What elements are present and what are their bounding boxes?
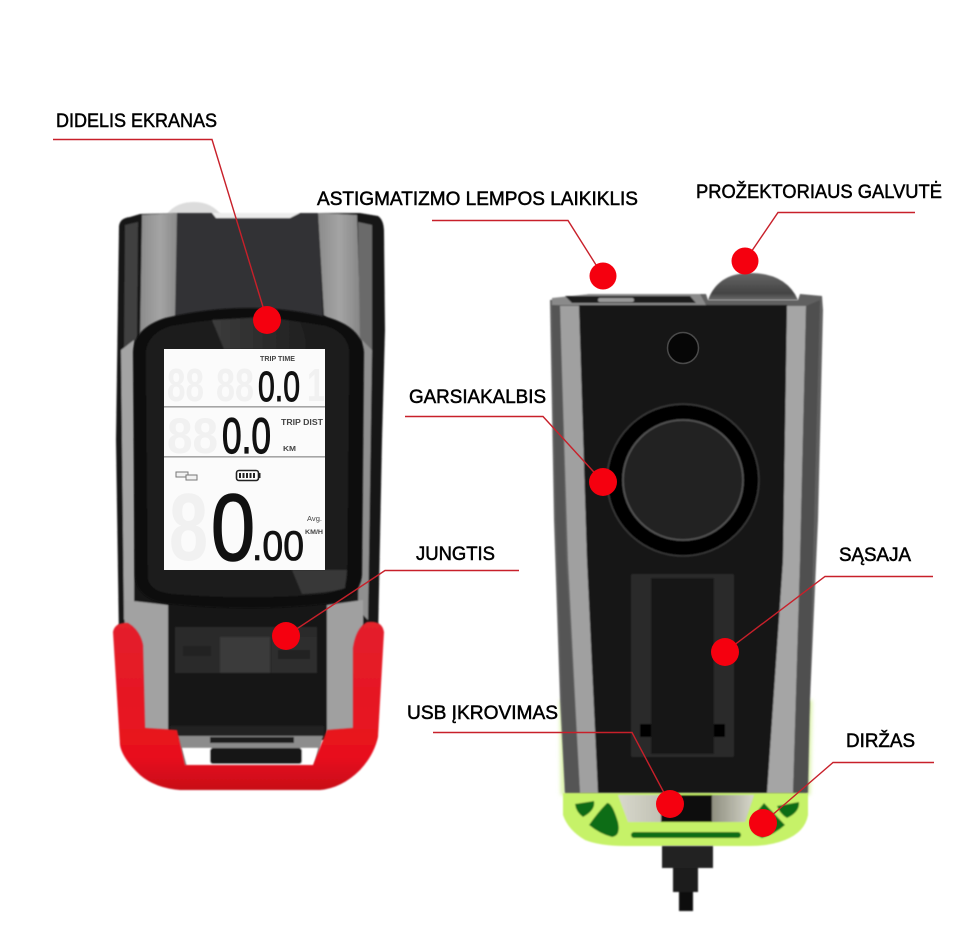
speed readout: [211, 475, 323, 581]
front device body: [116, 213, 385, 740]
green strap: [563, 793, 808, 846]
callout: diržas: DIRŽAS: [846, 730, 915, 752]
mounting hole: [668, 332, 698, 364]
projector dome: [708, 273, 798, 300]
icon: bike link: [176, 472, 197, 480]
callout: sąsaja: SĄSAJA: [839, 545, 911, 566]
callout: didelis ekranas: DIDELIS EKRANAS: [56, 111, 217, 132]
callout: astigmatizmo lempos laikiklis: [317, 189, 638, 290]
speed readout: .00: [252, 522, 304, 569]
callout: usb įkrovimas: USB ĮKROVIMAS: [407, 703, 558, 724]
mount slot: [170, 726, 324, 766]
control buttons: [175, 627, 317, 673]
callout: astigmatizmo lempos laikiklis: ASTIGMATIZMO LEMPOS LAIKIKLIS: [317, 189, 638, 210]
speed readout: KM/H: [305, 530, 323, 536]
front lamp dome: [167, 202, 222, 216]
USB cable: [662, 846, 713, 911]
display bezel: [133, 308, 364, 608]
callout: jungtis: JUNGTIS: [416, 544, 495, 565]
speed readout: 0: [211, 475, 255, 581]
speed readout: Avg.: [307, 514, 322, 523]
callout: garsiakalbis: GARSIAKALBIS: [409, 387, 546, 408]
left device: front view with display: [113, 202, 385, 790]
callout: garsiakalbis: [405, 387, 617, 496]
trip distance readout: TRIP DIST: [281, 418, 323, 427]
speaker: [607, 404, 759, 556]
trip distance readout: 0.0: [222, 408, 271, 464]
trip time readout: TRIP TIME: [260, 354, 295, 363]
trip time readout: [258, 354, 300, 411]
red strap: [113, 622, 384, 790]
callout: didelis ekranas: [53, 111, 281, 334]
icon: battery: [236, 470, 260, 480]
callout: prožektoriaus galvutė: PROŽEKTORIAUS GALVUTĖ: [696, 181, 942, 203]
ghost segments: 88: [216, 359, 254, 411]
callout: prožektoriaus galvutė: [696, 181, 942, 274]
right device: back view: [550, 273, 823, 911]
ghost segments: 88: [167, 408, 218, 464]
ghost segments: 8: [169, 474, 208, 581]
trip distance readout: KM: [283, 444, 296, 453]
callout: diržas: [749, 730, 934, 837]
callout: usb įkrovimas: [407, 703, 684, 818]
ghost segments: 1: [307, 359, 325, 411]
ghost segments: 88: [167, 359, 204, 411]
callout: jungtis: [272, 544, 519, 650]
trip distance readout: [222, 408, 323, 464]
ghost segments: [167, 359, 325, 581]
back device body: [550, 294, 823, 795]
LCD screen: [164, 349, 325, 581]
interface bracket: [631, 574, 734, 757]
trip time readout: 0.0: [258, 363, 300, 411]
green edge glow: [560, 700, 812, 795]
callout: sąsaja: [711, 545, 933, 666]
